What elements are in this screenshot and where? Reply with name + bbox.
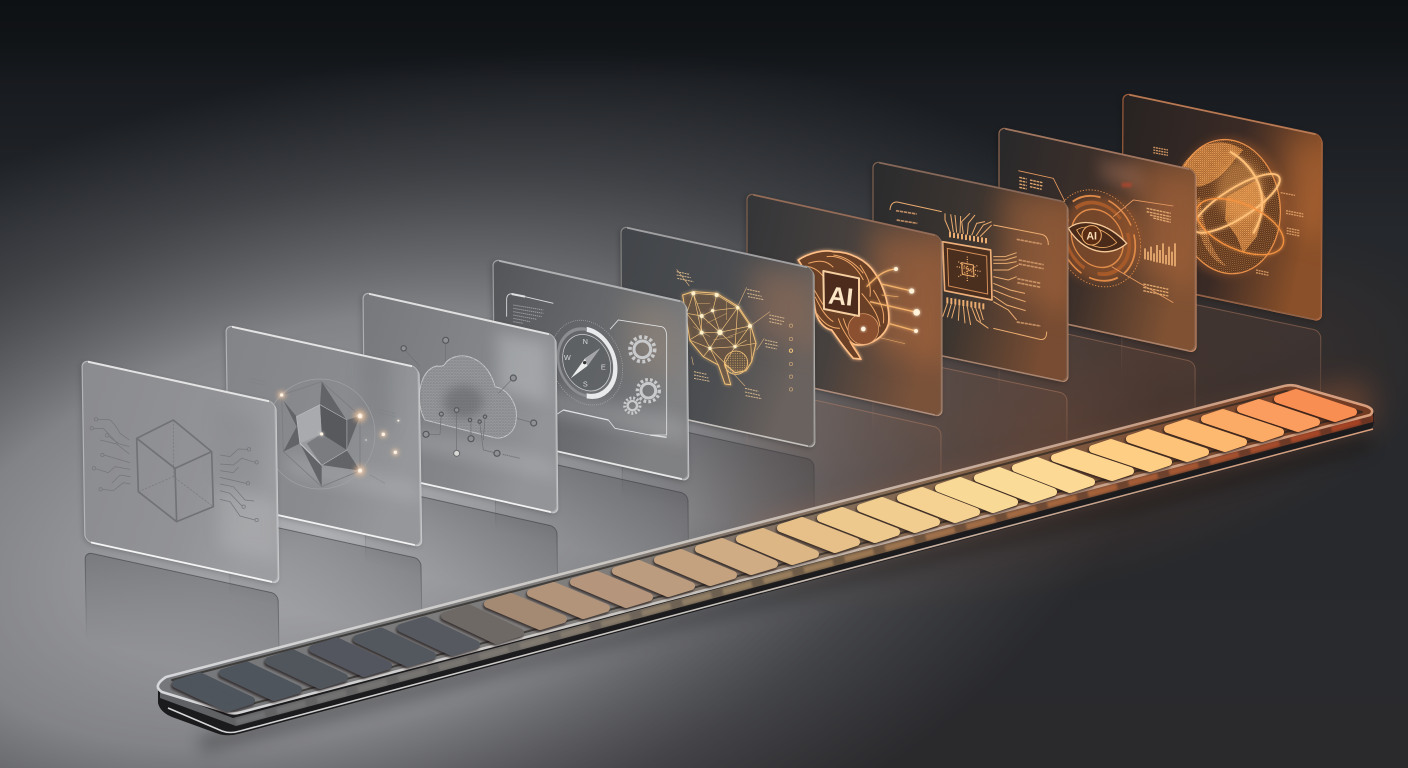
icon: glowing brain with AI chip: [798, 251, 920, 359]
text: AI chip label: AI: [827, 282, 854, 312]
text: compass letters: [564, 337, 606, 389]
panel 4: compass and gears: [492, 259, 689, 483]
icon: circuit chip with traces: [890, 202, 1048, 340]
text: compass letters: N: [583, 337, 588, 346]
panel 5: neural network brain: [620, 226, 816, 450]
panel 9: global network globe: [1121, 93, 1329, 324]
panel 2: crystal polyhedron: [225, 320, 422, 549]
icon: glowing globe with orbits: [1153, 133, 1303, 281]
28 segments from grey to orange: [176, 393, 1353, 708]
text: compass letters: W: [564, 353, 571, 362]
text: compass letters: S: [583, 380, 588, 389]
icon: speckled cloud with nodes: [401, 337, 537, 458]
icon: compass with gears: [507, 294, 667, 437]
panel 1: wireframe cube: [81, 360, 280, 586]
icon: golden network brain: [677, 269, 793, 399]
panel 6: AI brain: [746, 193, 948, 420]
icon: AI eye with concentric rings and charts: [1018, 171, 1175, 303]
panel 8: AI vision eye: [998, 127, 1197, 354]
panel 3: cloud network: [362, 292, 558, 516]
text: compass letters: E: [601, 362, 606, 371]
icon: cube with circuit traces: [90, 418, 258, 522]
icon: faceted star crystal: [250, 370, 399, 498]
bar base and side wall: [158, 410, 1374, 735]
floor reflections of the glass panels: [85, 289, 1321, 684]
text: AI in the eye: AI: [1086, 230, 1097, 242]
panel 7: microchip: [872, 161, 1074, 386]
bar top plate: [158, 385, 1372, 713]
progress bar: glowing segmented track: [158, 385, 1374, 745]
